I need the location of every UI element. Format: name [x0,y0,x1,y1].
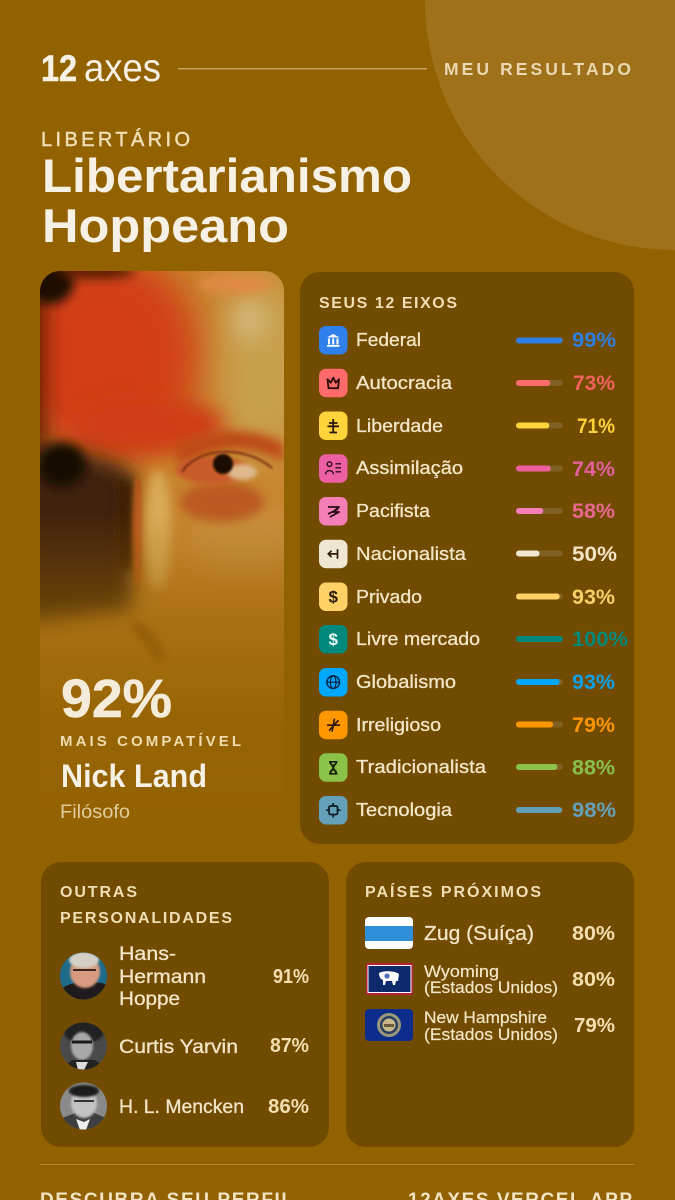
row: H. L. Mencken [60,1082,309,1130]
bar [516,594,563,600]
value: 79% [574,1014,615,1037]
label: Nacionalista [356,544,467,564]
icon: chip [319,796,348,824]
bar [516,550,563,556]
icon: globe [319,668,348,696]
value: 100% [572,628,628,651]
value: 80% [572,922,615,945]
label: Irreligioso [356,715,441,735]
icon: crown [319,369,348,397]
name [424,1009,558,1044]
bar [516,636,563,642]
value: 99% [572,329,616,352]
panel: nearby countries [346,862,634,1147]
value: 88% [572,756,615,780]
row: Curtis Yarvin [60,1021,309,1070]
name: Wyoming [424,963,499,981]
panel heading: axes: SEUS 12 EIXOS [319,295,457,312]
row: Privado [319,582,615,611]
value: 98% [572,799,616,822]
avatar: Yarvin [60,1021,108,1070]
row: New Hampshire [365,1009,615,1044]
portrait painting [40,271,284,845]
eyebrow: ideology group: LIBERTÁRIO [41,128,190,151]
bar [516,508,563,514]
row: Tecnologia [319,796,616,824]
value: 71% [577,415,615,438]
icon: pillar scale [319,412,348,440]
match caption: MAIS COMPATÍVEL [60,733,241,750]
value: 74% [572,458,615,481]
row: Federal [319,326,616,354]
value: 58% [572,500,615,523]
name: H. L. Mencken [119,1097,244,1118]
icon: dollar light [319,625,348,654]
panel heading: personalities: PERSONALIDADES [60,910,232,927]
logo: 12 axes: axes [84,47,161,90]
name: Curtis Yarvin [119,1037,238,1058]
icon: asterisk [319,711,348,739]
row: Hans-Hermann Hoppe [60,944,309,1010]
icon: dollar light: $ [328,630,338,649]
avatar: Mencken [60,1082,108,1130]
name: New Hampshire [424,1009,547,1027]
logo: 12 axes [41,47,161,90]
name [424,963,558,997]
row: Livre mercado [319,625,628,654]
icon: dollar dark: $ [328,588,338,606]
logo: 12 axes: 12 [41,48,77,89]
icon: arrow to bar [319,540,348,568]
value: 91% [273,965,309,988]
panel: other personalities [41,862,329,1147]
icon: dollar dark [319,582,348,611]
title: Hoppeano [42,199,289,252]
value: 50% [572,543,617,566]
title [42,149,412,252]
flag: New Hampshire [365,1009,413,1041]
label: Liberdade [356,416,443,436]
value: 87% [270,1034,309,1057]
bar [516,764,563,770]
name: Hoppe [119,989,180,1010]
row: Tradicionalista [319,753,615,782]
label: Privado [356,587,422,607]
bar [516,338,563,344]
bar [516,422,563,428]
value: 73% [573,372,615,395]
person name: Nick Land [61,758,207,794]
name: Zug (Suíça) [424,923,534,945]
flag: Wyoming [366,963,413,995]
title: Libertarianismo [42,149,412,202]
value: 93% [572,586,615,609]
value: 86% [268,1095,309,1118]
value: 80% [572,968,615,991]
name: Hans- [119,944,176,965]
label: Autocracia [356,373,453,393]
row: Globalismo [319,668,615,696]
name: Hermann [119,967,206,988]
label: Pacifista [356,501,431,521]
bar [516,722,563,728]
avatar: Hoppe [60,952,108,1000]
bar [516,807,563,813]
label: Livre mercado [356,629,480,649]
label: Assimilação [356,458,463,478]
bar [516,679,563,685]
row: Assimilação [319,454,615,483]
icon: hourglass [319,753,348,782]
row: Irreligioso [319,711,615,739]
row: Pacifista [319,497,615,526]
panel: 12 axes [300,272,634,844]
icon: dove [319,497,348,526]
panel heading: personalities: OUTRAS [60,884,137,901]
icon: person list [319,454,348,483]
name: (Estados Unidos) [424,1026,558,1044]
label: Globalismo [356,672,456,692]
row: Wyoming [366,963,615,997]
flag: Zug [365,917,413,949]
value: 93% [572,671,615,694]
name: (Estados Unidos) [424,979,558,997]
row: Autocracia [319,369,615,397]
label: Federal [356,330,421,350]
row: Nacionalista [319,540,617,568]
panel heading: countries: PAÍSES PRÓXIMOS [365,882,541,901]
row: Liberdade [319,412,615,440]
name [119,944,206,1010]
value: 79% [572,714,615,737]
label: Tradicionalista [356,757,487,777]
label: Tecnologia [356,800,453,820]
icon: bank [319,326,348,354]
header label: meu resultado: MEU RESULTADO [444,59,631,79]
row: Zug [365,917,615,949]
match percentage: 92% [61,669,172,729]
panel: most compatible person [40,271,284,845]
bar [516,466,563,472]
bar [516,380,563,386]
panel heading: personalities [60,884,232,927]
person role: Filósofo [60,802,130,823]
